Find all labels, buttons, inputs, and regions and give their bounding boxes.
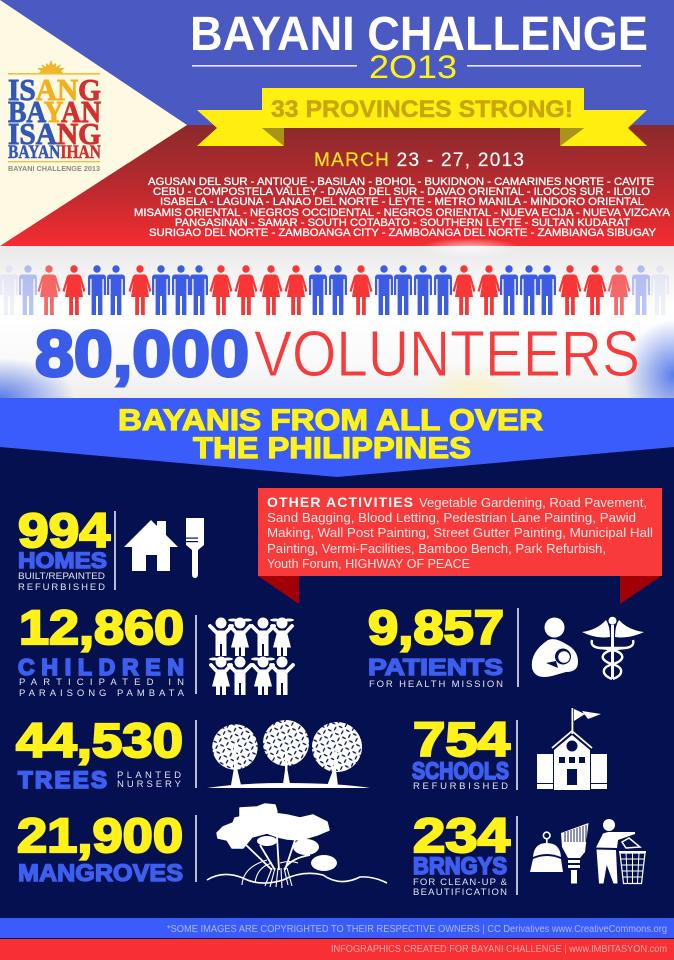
volunteers panel background <box>0 238 674 438</box>
icon: three trees <box>207 720 370 788</box>
headline: 80,000 volunteers <box>35 317 640 390</box>
stat: trees <box>16 715 196 794</box>
icon: paint brush <box>186 518 204 578</box>
stat: children: CHILDREN <box>18 654 184 680</box>
subtitle year: 2O13 <box>369 49 457 85</box>
section banner: THE PHILIPPINES <box>193 432 471 465</box>
icon: school building <box>537 708 607 790</box>
stat: schools: REFURBISHED <box>413 781 508 792</box>
icon: dustpan <box>530 832 563 872</box>
callout: other activities: Making, Wall Post Painting, Street Gutter Painting, Municipal Hall <box>267 525 653 540</box>
stat: mangroves: 21,900 <box>17 810 183 863</box>
stat: schools <box>412 714 517 792</box>
icon: broom <box>561 823 588 884</box>
footer: credit strip <box>0 939 674 960</box>
stat: patients: PATIENTS <box>368 654 503 680</box>
stat: barangays: BEAUTIFICATION <box>413 887 507 898</box>
stat: barangays: 234 <box>413 810 510 863</box>
callout: other activities: Painting, Vermi-Facilities, Bamboo Bench, Park Refurbish, <box>267 541 606 556</box>
flag red band <box>0 125 674 246</box>
people row <box>0 265 669 315</box>
callout: other activities: Sand Bagging, Blood Letting, Pedestrian Lane Painting, Pawid <box>267 510 636 525</box>
callout: other activities: OTHER ACTIVITIES <box>267 494 413 510</box>
stat: schools: 754 <box>413 714 510 767</box>
province list <box>134 176 671 239</box>
logo: Isang Bayan Isang Bayanihan: ISANG <box>8 72 101 107</box>
logo sun icon <box>37 60 65 73</box>
stat: mangroves: MANGROVES <box>18 860 183 887</box>
logo: Isang Bayan Isang Bayanihan: BAYANI CHALLENGE 2013 <box>8 166 100 173</box>
logo: Isang Bayan Isang Bayanihan: BAYAN <box>8 94 101 129</box>
province list: CEBU - COMPOSTELA VALLEY - DAVAO DEL SUR - DAVAO ORIENTAL - ILOCOS SUR - ILOILO <box>153 186 650 198</box>
banner heading: BAYANIS FROM ALL OVER <box>118 404 543 437</box>
province list: ISABELA - LAGUNA - LANAO DEL NORTE - LEYTE - METRO MANILA - MINDORO ORIENTAL <box>160 196 644 208</box>
province list: AGUSAN DEL SUR - ANTIQUE - BASILAN - BOHOL - BUKIDNON - CAMARINES NORTE - CAVITE <box>148 176 654 188</box>
section banner <box>0 398 674 477</box>
title: BAYANI CHALLENGE <box>190 8 648 61</box>
province list: MISAMIS ORIENTAL - NEGROS OCCIDENTAL - NEGROS ORIENTAL - NUEVA ECIJA - NUEVA VIZCAYA <box>134 207 671 219</box>
callout: other activities: Youth Forum, HIGHWAY OF PEACE <box>267 556 470 571</box>
icon: mangrove tree <box>207 804 387 888</box>
icon: person littering in bin <box>596 819 646 884</box>
stat: trees: PLANTED <box>117 770 181 781</box>
stat: mangroves <box>17 810 196 887</box>
footer: copyright strip <box>0 918 674 938</box>
icon: caduceus <box>582 617 644 679</box>
ribbon text: 33 PROVINCES STRONG! <box>271 96 573 123</box>
date: MARCH 23 - 27, 2013 <box>314 150 524 171</box>
logo: Isang Bayan Isang Bayanihan <box>8 60 101 173</box>
stat: children: 12,860 <box>19 602 184 655</box>
callout: other activities <box>258 488 662 604</box>
stat: barangays: BRNGYS <box>413 853 507 880</box>
stat: children: PARAISONG PAMBATA <box>19 688 185 699</box>
stat: patients: FOR HEALTH MISSION <box>369 679 503 690</box>
stat: trees: 44,530 <box>16 715 183 768</box>
logo: Isang Bayan Isang Bayanihan: BAYANIHAN <box>8 142 101 163</box>
stat: trees: TREES <box>18 767 107 794</box>
icon: mother and child <box>532 618 578 677</box>
callout: other activities: Vegetable Gardening, Road Pavement, <box>419 495 647 510</box>
flag white triangle <box>0 0 187 246</box>
stat: homes <box>18 505 115 593</box>
stat: homes: BUILT/REPAINTED <box>18 571 105 582</box>
ribbon <box>197 88 647 146</box>
stat: patients <box>368 602 518 690</box>
flag blue band <box>0 0 674 125</box>
stat: barangays <box>413 810 517 898</box>
logo: Isang Bayan Isang Bayanihan: ISANG <box>8 116 101 151</box>
stat: homes: REFURBISHED <box>18 582 105 593</box>
stat: homes: 994 <box>18 505 110 558</box>
stat: trees: NURSERY <box>117 779 182 790</box>
province list: SURIGAO DEL NORTE - ZAMBOANGA CITY - ZAMBOANGA DEL NORTE - ZAMBIANGA SIBUGAY <box>149 227 657 239</box>
stat: homes: HOMES <box>18 548 107 573</box>
headline: 80,000 volunteers: 80,000 <box>35 317 249 390</box>
province list: PANGASINAN - SAMAR - SOUTH COTABATO - SOUTHERN LEYTE - SULTAN KUDARAT <box>175 217 630 229</box>
stat: children: PARTICIPATED IN <box>19 677 184 688</box>
stat: children <box>18 602 196 699</box>
icon: house <box>124 520 178 571</box>
stat: schools: SCHOOLS <box>412 758 509 785</box>
stat: barangays: FOR CLEAN-UP & <box>413 877 508 888</box>
header panel <box>0 0 674 246</box>
icon: children group <box>209 618 294 695</box>
stat: patients: 9,857 <box>368 602 504 655</box>
